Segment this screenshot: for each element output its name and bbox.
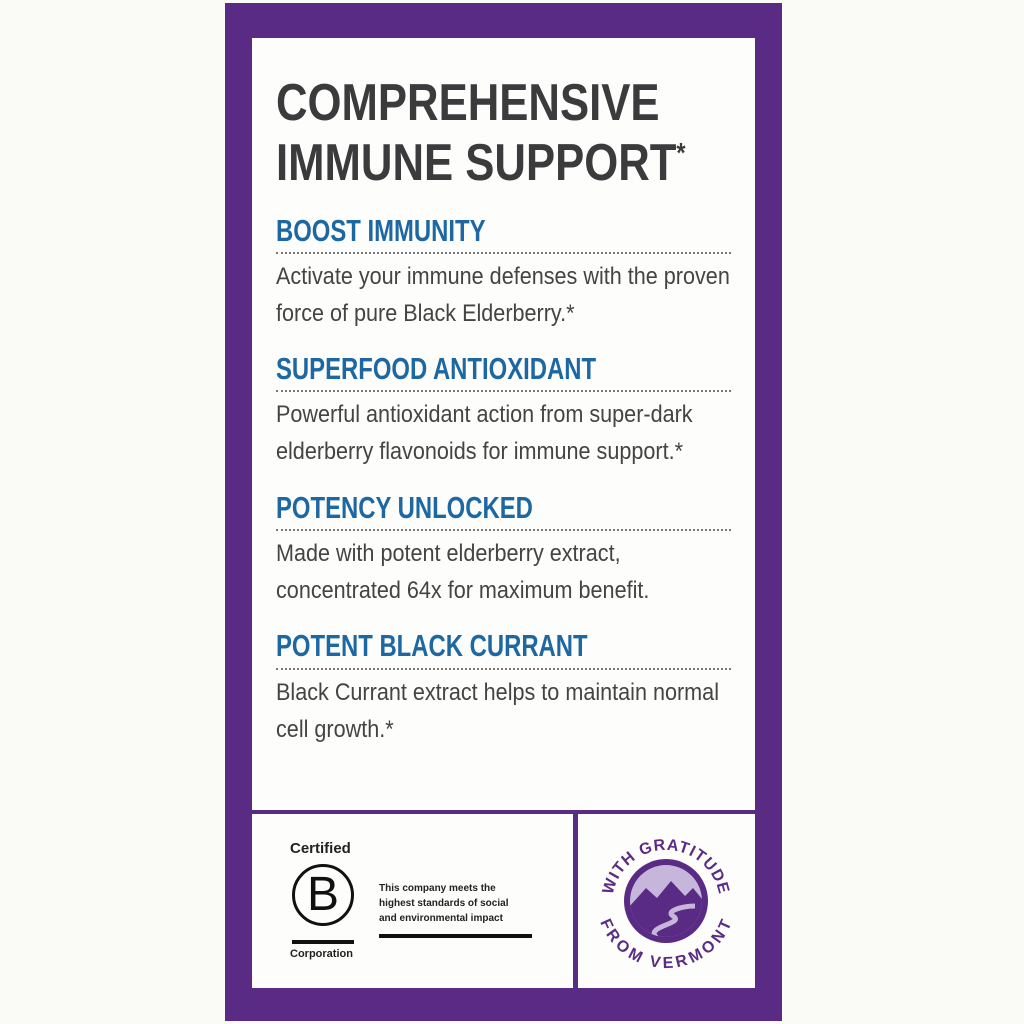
text: boost immunity: force of pure Black Elderberry.* bbox=[276, 300, 575, 327]
text: boost immunity: Activate your immune defenses with the proven bbox=[276, 263, 730, 290]
text: superfood antioxidant bbox=[276, 401, 693, 465]
icon: with gratitude from vermont bbox=[600, 839, 730, 968]
heading: potency unlocked: POTENCY UNLOCKED bbox=[276, 490, 533, 525]
text: potency unlocked: concentrated 64x for maximum benefit. bbox=[276, 577, 649, 604]
b corp statement: highest standards of social bbox=[379, 898, 508, 909]
heading: superfood antioxidant: SUPERFOOD ANTIOXIDANT bbox=[276, 351, 596, 386]
b corp logo: Corporation bbox=[290, 948, 353, 960]
title: COMPREHENSIVE bbox=[276, 74, 659, 132]
heading: boost immunity: BOOST IMMUNITY bbox=[276, 213, 486, 248]
panel: b corp bbox=[252, 814, 573, 988]
icon: with gratitude from vermont: WITH GRATITUDE bbox=[602, 839, 730, 894]
b corp statement bbox=[379, 883, 532, 938]
text: superfood antioxidant: Powerful antioxidant action from super-dark bbox=[276, 401, 693, 428]
b corp logo: Certified bbox=[290, 840, 351, 857]
title: IMMUNE SUPPORT* bbox=[276, 134, 686, 192]
text: superfood antioxidant: elderberry flavonoids for immune support.* bbox=[276, 438, 683, 465]
panel: vermont badge bbox=[578, 814, 755, 988]
main white panel bbox=[252, 38, 755, 810]
b corp statement: This company meets the bbox=[379, 883, 496, 894]
b corp logo: B bbox=[307, 868, 339, 921]
title bbox=[276, 74, 686, 192]
text: potent black currant bbox=[276, 679, 719, 743]
text: potency unlocked bbox=[276, 540, 649, 604]
heading: potent black currant: POTENT BLACK CURRANT bbox=[276, 628, 588, 663]
text: potent black currant: cell growth.* bbox=[276, 716, 394, 743]
b corp statement: and environmental impact bbox=[379, 913, 503, 924]
icon: with gratitude from vermont: FROM VERMONT bbox=[600, 918, 730, 968]
purple frame bbox=[225, 3, 782, 1021]
b corp logo bbox=[290, 840, 354, 960]
text: potent black currant: Black Currant extract helps to maintain normal bbox=[276, 679, 719, 706]
text: boost immunity bbox=[276, 263, 730, 327]
text: potency unlocked: Made with potent elderberry extract, bbox=[276, 540, 621, 567]
